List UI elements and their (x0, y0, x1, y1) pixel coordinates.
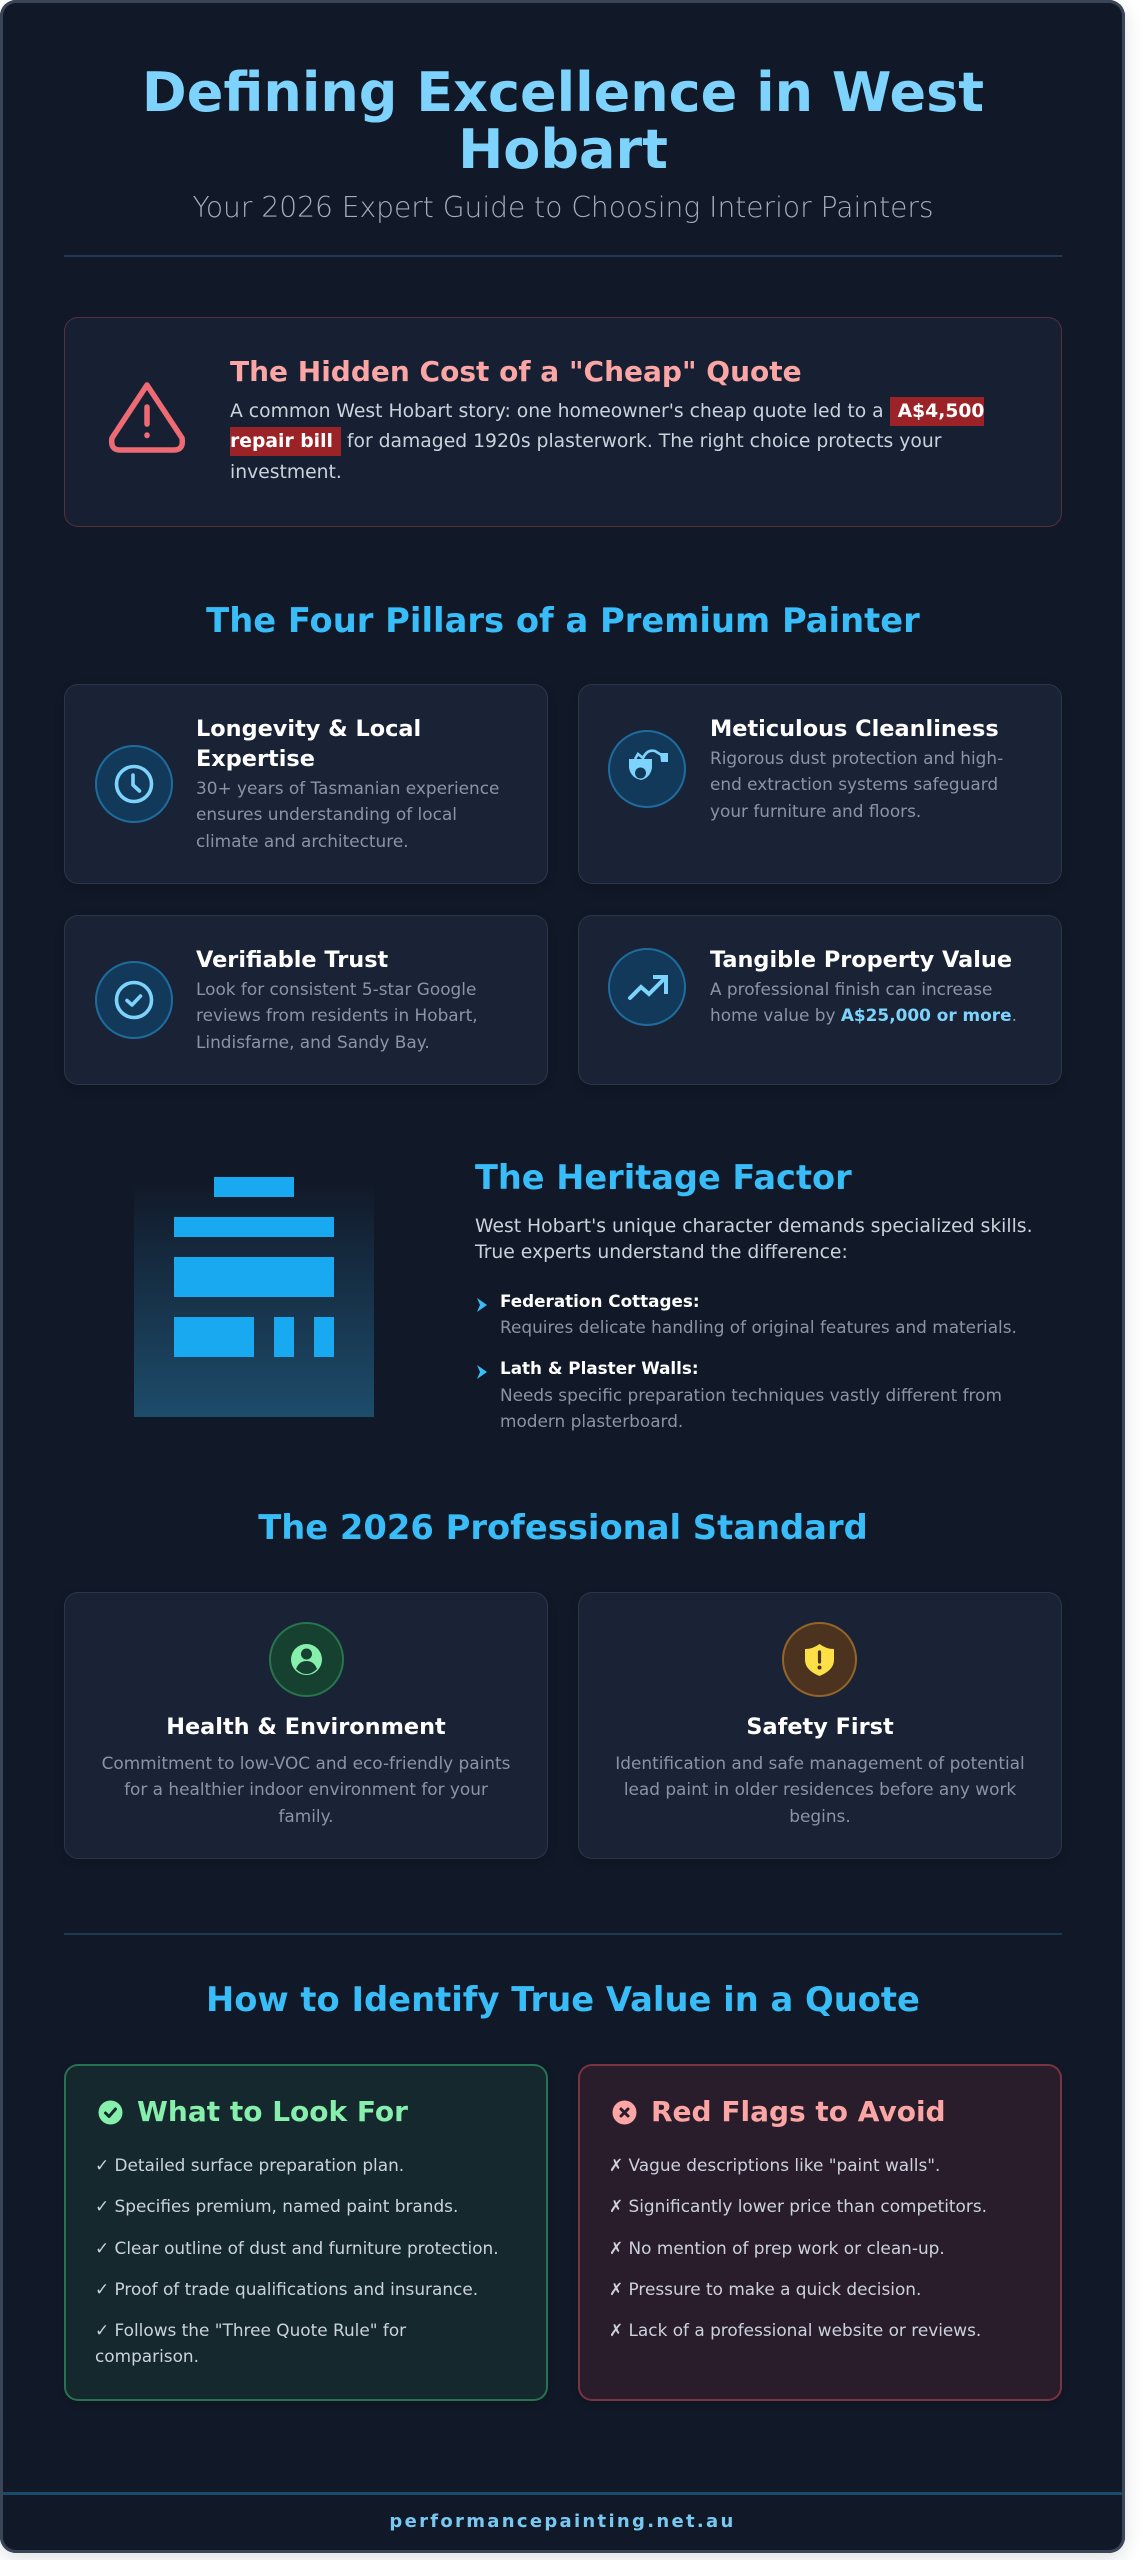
heritage item: federation cottages (477, 1291, 1017, 1337)
heritage item: federation cottages: Federation Cottages: (500, 1291, 700, 1311)
card description (102, 1753, 510, 1826)
pillar description: reviews from residents in Hobart, (196, 1005, 478, 1025)
card description: for a healthier indoor environment for your (124, 1779, 488, 1799)
list heading: What to Look For (137, 2095, 408, 2128)
list heading: Red Flags to Avoid (651, 2095, 946, 2128)
title (142, 61, 984, 181)
heritage intro text (474, 1216, 1033, 1263)
pillar description: 30+ years of Tasmanian experience (196, 778, 499, 798)
pillar description: climate and architecture. (196, 831, 409, 851)
heritage intro text: West Hobart's unique character demands specialized skills. (475, 1216, 1033, 1237)
panel: cleanliness (578, 684, 1062, 884)
icon: green check (98, 2100, 122, 2124)
card description: Commitment to low-VOC and eco-friendly paints (102, 1753, 510, 1773)
pillar title: Verifiable Trust (196, 947, 388, 973)
checklist: ✓ Clear outline of dust and furniture protection. (95, 2238, 499, 2258)
callout text: investment. (230, 462, 342, 483)
pillar title: Tangible Property Value (710, 947, 1012, 973)
card title: Safety First (746, 1714, 894, 1740)
warning list: ✗ Significantly lower price than competitors. (609, 2196, 987, 2216)
heading: professional standard: The 2026 Professional Standard (258, 1508, 868, 1547)
pillar title (196, 716, 421, 772)
pillar title: Meticulous Cleanliness (710, 716, 999, 742)
panel: hidden cost callout (64, 317, 1062, 527)
icon: trending up (608, 948, 686, 1026)
panel: trust (64, 915, 548, 1085)
heritage item: federation cottages: Requires delicate handling of original features and materials. (500, 1317, 1017, 1337)
checklist: ✓ Detailed surface preparation plan. (95, 2155, 404, 2175)
card description: lead paint in older residences before any work (624, 1779, 1016, 1799)
card description (615, 1753, 1025, 1826)
heritage intro text: True experts understand the difference: (475, 1242, 848, 1263)
pillar description: end extraction systems safeguard (710, 774, 998, 794)
warning list: ✗ No mention of prep work or clean-up. (609, 2238, 945, 2258)
pillar description: A professional finish can increase (710, 979, 992, 999)
pillar description: ensures understanding of local (196, 804, 457, 824)
footer url: performancepainting.net.au (389, 2511, 736, 2532)
warning list: ✗ Pressure to make a quick decision. (609, 2279, 921, 2299)
warning list: ✗ Lack of a professional website or reviews. (609, 2320, 981, 2340)
icon: person badge (268, 1622, 344, 1697)
checklist: comparison. (95, 2346, 199, 2366)
panel: safety first (578, 1592, 1062, 1859)
card description: family. (278, 1806, 334, 1826)
icon: clock (95, 745, 173, 823)
pillar description (710, 979, 1017, 1025)
heritage item: lath and plaster: Lath & Plaster Walls: (500, 1358, 699, 1378)
card description: Identification and safe management of potential (615, 1753, 1025, 1773)
panel: red flags (578, 2064, 1062, 2401)
checklist: ✓ Specifies premium, named paint brands. (95, 2196, 458, 2216)
pillar description: Rigorous dust protection and high- (710, 748, 1003, 768)
checklist: ✓ Follows the "Three Quote Rule" for (95, 2320, 406, 2340)
heading: four pillars: The Four Pillars of a Premium Painter (206, 601, 920, 640)
heritage item: lath and plaster: modern plasterboard. (500, 1411, 683, 1431)
callout text (230, 397, 984, 483)
checklist (95, 2155, 499, 2366)
panel: what to look for (64, 2064, 548, 2401)
heading: identify true value: How to Identify True Value in a Quote (206, 1980, 920, 2019)
heritage illustration: building (134, 1177, 374, 1417)
subtitle: Your 2026 Expert Guide to Choosing Interior Painters (192, 191, 934, 224)
warning list: ✗ Vague descriptions like "paint walls". (609, 2155, 940, 2175)
callout text: repair bill for damaged 1920s plasterwork. The right choice protects your (230, 431, 941, 452)
callout heading: The Hidden Cost of a "Cheap" Quote (230, 355, 802, 388)
callout text: A common West Hobart story: one homeowner's cheap quote led to a A$4,500 (230, 401, 984, 422)
icon: warning triangle (108, 382, 186, 453)
icon: shield alert (782, 1622, 857, 1697)
heritage item: lath and plaster (477, 1358, 1002, 1431)
icon: check circle (95, 961, 173, 1039)
heritage heading: The Heritage Factor (475, 1158, 852, 1197)
pillar description: Lindisfarne, and Sandy Bay. (196, 1032, 430, 1052)
title: Hobart (458, 118, 668, 181)
card title: Health & Environment (166, 1714, 446, 1740)
arrow (477, 1298, 487, 1312)
title: Defining Excellence in West (142, 61, 984, 124)
pillar description (196, 778, 499, 851)
checklist: ✓ Proof of trade qualifications and insurance. (95, 2279, 478, 2299)
panel: property value (578, 915, 1062, 1085)
pillar description: Look for consistent 5-star Google (196, 979, 476, 999)
pillar description (710, 748, 1003, 821)
panel: longevity (64, 684, 548, 884)
pillar description: your furniture and floors. (710, 801, 921, 821)
warning list (609, 2155, 987, 2340)
pillar description (196, 979, 478, 1052)
panel: health and environment (64, 1592, 548, 1859)
icon: red x (612, 2100, 636, 2124)
pillar title: Expertise (196, 746, 315, 772)
icon: vacuum (608, 730, 686, 808)
card description: begins. (789, 1806, 851, 1826)
pillar description: home value by A$25,000 or more. (710, 1005, 1017, 1025)
heritage item: lath and plaster: Needs specific preparation techniques vastly different from (500, 1385, 1002, 1405)
arrow (477, 1365, 487, 1379)
pillar title: Longevity & Local (196, 716, 421, 742)
